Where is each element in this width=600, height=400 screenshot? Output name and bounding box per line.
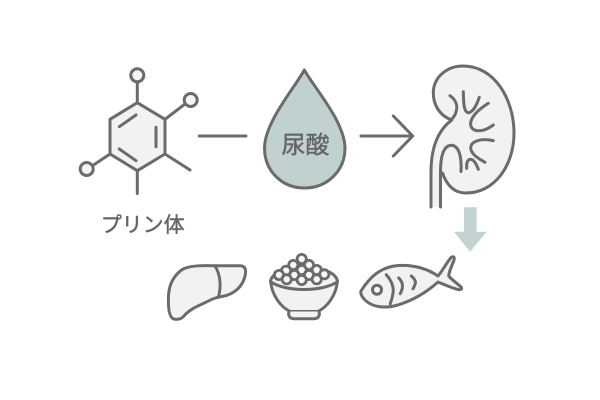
icon: bowl of rice bbox=[270, 254, 338, 319]
rice grains bbox=[274, 254, 329, 285]
icon: liver bbox=[168, 266, 246, 319]
bowl rim bbox=[271, 282, 337, 290]
bowl body bbox=[270, 268, 338, 312]
icon: purine molecule bbox=[80, 69, 197, 194]
label: uric acid: 尿酸 bbox=[282, 132, 330, 159]
arrow: to kidney bbox=[361, 116, 413, 156]
icon: fish bbox=[361, 257, 462, 307]
connector line bbox=[199, 134, 246, 138]
label: purine: プリン体 bbox=[101, 214, 185, 237]
icon: kidney bbox=[431, 66, 514, 207]
bowl foot bbox=[289, 312, 319, 319]
icon: uric acid drop bbox=[264, 70, 345, 188]
arrow: down bbox=[454, 207, 487, 252]
